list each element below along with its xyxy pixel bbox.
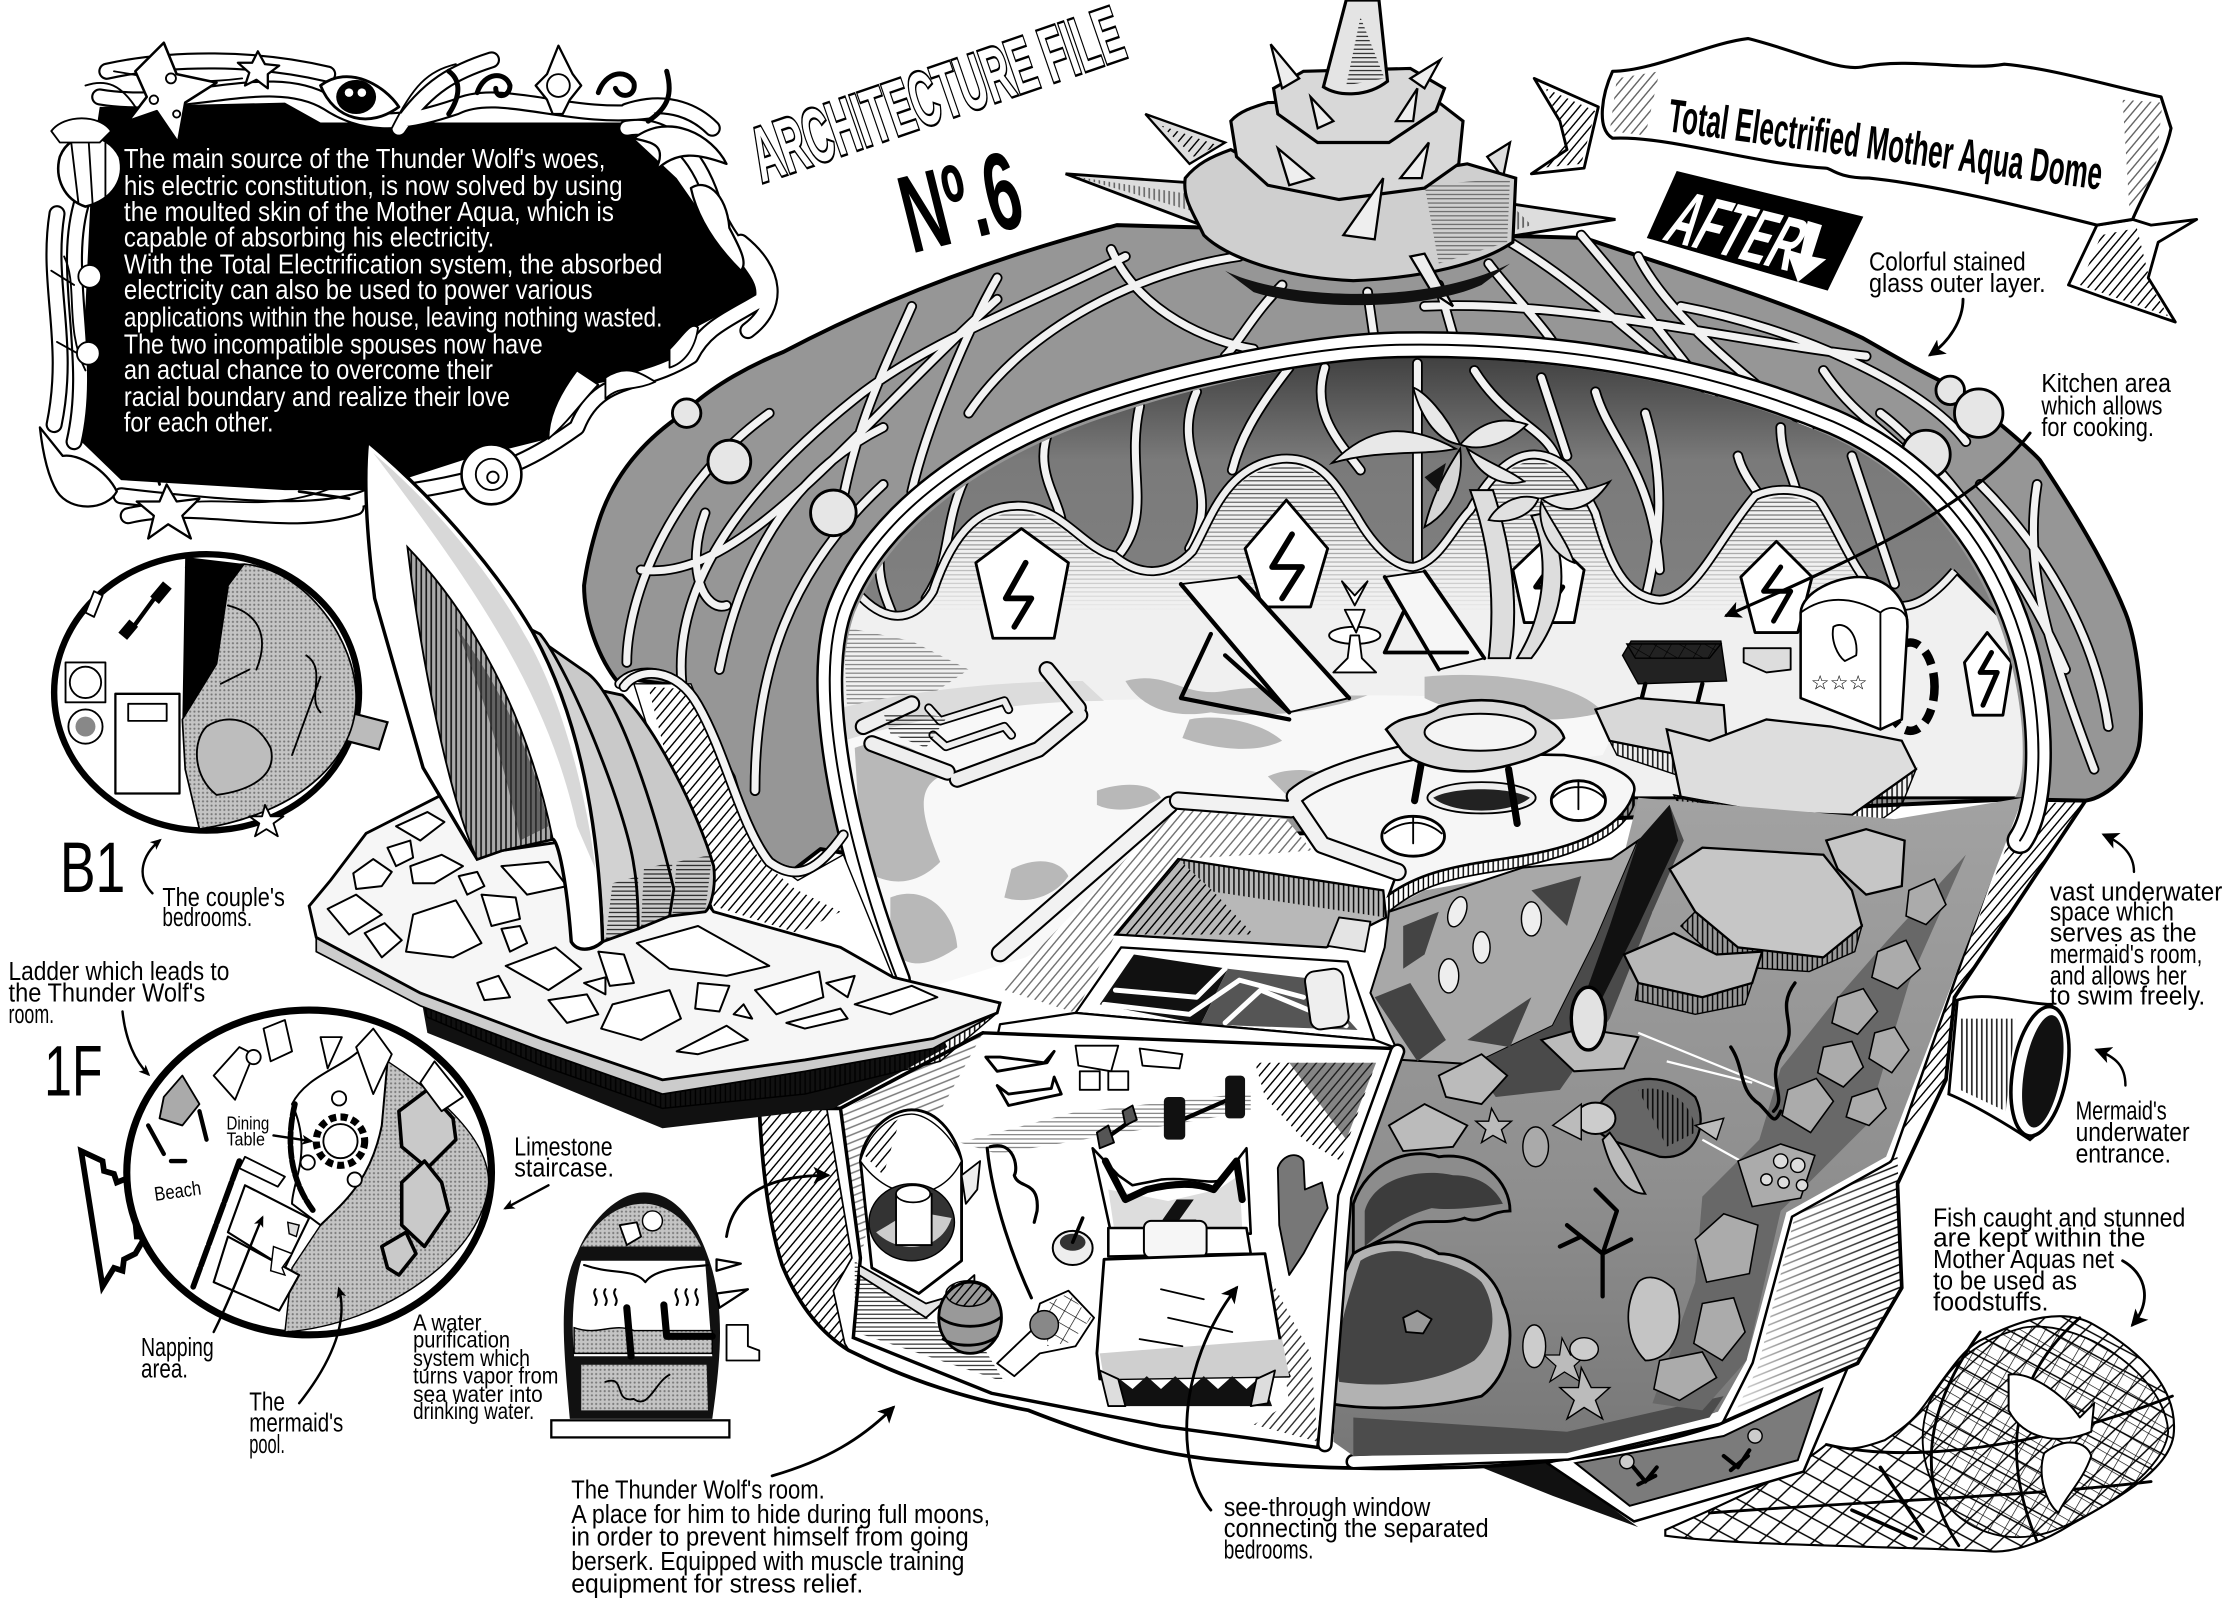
lattice of vines bbox=[620, 235, 2108, 872]
note: kitchen area: which allows bbox=[2041, 393, 2162, 421]
dumbbell and furniture bbox=[66, 581, 179, 794]
fish net bbox=[1665, 1316, 2174, 1552]
entrance stub bbox=[81, 1151, 145, 1286]
label: B1 bbox=[60, 829, 285, 932]
wave shadow hatching bbox=[933, 463, 1856, 605]
note: underwater space: to swim freely. bbox=[2050, 982, 2205, 1010]
note: underwater space: and allows her bbox=[2050, 962, 2187, 990]
large star bbox=[128, 43, 217, 142]
tube ribs bbox=[570, 684, 714, 916]
floor hatch wedge below stone border bbox=[1000, 809, 1389, 1013]
cliff rocks with fish bbox=[1370, 805, 1684, 1097]
plaque text: applications within the house, leaving nothing wasted. bbox=[124, 301, 662, 332]
mortar bbox=[1053, 1218, 1093, 1265]
hanging interior vines bbox=[879, 363, 1895, 634]
plaque text bbox=[124, 143, 662, 438]
note: stained glass: glass outer layer. bbox=[1869, 270, 2046, 298]
note: fish storage: foodstuffs. bbox=[1933, 1289, 2049, 1317]
note: underwater entrance bbox=[2076, 1050, 2190, 1168]
rosettes bbox=[78, 265, 101, 288]
plaque text: The main source of the Thunder Wolf's woes, bbox=[124, 143, 605, 174]
dome rim ring bbox=[830, 345, 2038, 980]
plaque text: for each other. bbox=[124, 407, 274, 438]
note: ladder: room. bbox=[9, 1001, 54, 1029]
spiked crown bbox=[1066, 0, 1615, 306]
banner tails bbox=[1531, 78, 1598, 174]
vine detail bbox=[51, 64, 456, 506]
ruffled dining table bbox=[1386, 700, 1564, 823]
hatched lower right wall bbox=[1731, 1157, 1902, 1420]
note: see-through window: see-through window bbox=[1224, 1494, 1431, 1522]
hatched right wall bbox=[1886, 801, 2086, 1157]
lower room: Thunder Wolf's room bbox=[840, 1033, 1393, 1447]
note: water purification: A water bbox=[413, 1310, 482, 1336]
note: stained glass bbox=[1869, 249, 2046, 355]
note: underwater space: vast underwater bbox=[2050, 878, 2223, 906]
hatched skirt of the tube bbox=[624, 673, 893, 977]
left sand steps bbox=[863, 670, 1080, 779]
note: water purification: purification bbox=[413, 1327, 510, 1353]
info plaque with ornate frame bbox=[40, 43, 770, 539]
limestone steps bbox=[356, 1029, 463, 1275]
note: Thunder Wolf's room: A place for him to hide during full moons, bbox=[571, 1499, 990, 1529]
eye ornament bbox=[321, 77, 399, 119]
racket net bbox=[997, 1291, 1094, 1376]
note: fish storage: are kept within the bbox=[1933, 1225, 2145, 1253]
fish in net bbox=[2009, 1374, 2094, 1513]
giant clam bbox=[1324, 1154, 1510, 1408]
note: mermaid's pool: The bbox=[249, 1388, 285, 1416]
note: see-through window bbox=[1187, 1288, 1489, 1565]
note: water purification bbox=[413, 1310, 558, 1424]
painted keel plate bbox=[1576, 1389, 1822, 1506]
right rock column bbox=[1652, 855, 1966, 1410]
white floor band under rug bbox=[997, 1013, 1397, 1061]
note: kitchen area bbox=[1727, 370, 2172, 615]
lower stepping platforms bbox=[1624, 829, 1905, 1014]
label: B1: The couple's bbox=[162, 884, 285, 912]
black plaque body bbox=[78, 103, 755, 490]
note: ladder: Ladder which leads to bbox=[9, 958, 229, 986]
top dome compartment bbox=[581, 1204, 701, 1247]
note: ladder: the Thunder Wolf's bbox=[9, 980, 205, 1008]
kitchen: grill, counter, refrigerator and float: ☆☆☆ bbox=[1811, 671, 1868, 695]
fishing rod bbox=[987, 1146, 1037, 1298]
cylinder base outer wall bbox=[759, 799, 2086, 1468]
underwater space bbox=[1324, 798, 2023, 1456]
note: water purification: turns vapor from bbox=[413, 1362, 558, 1388]
note: fish storage: to be used as bbox=[1933, 1267, 2077, 1295]
note: Thunder Wolf's room: berserk. Equipped with muscle training bbox=[571, 1546, 964, 1576]
note: mermaid's pool bbox=[249, 1289, 343, 1459]
fleur ornament bbox=[536, 46, 581, 114]
plaque text: capable of absorbing his electricity. bbox=[124, 221, 494, 252]
note: fish storage: Mother Aquas net bbox=[1933, 1246, 2114, 1274]
note: Thunder Wolf's room: The Thunder Wolf's room. bbox=[571, 1475, 825, 1505]
small spikes bbox=[1271, 44, 1453, 306]
label: 1F: 1F bbox=[44, 1033, 103, 1112]
plan labels: Dining bbox=[227, 1113, 269, 1134]
note: underwater entrance: underwater bbox=[2076, 1119, 2190, 1147]
dumbbells bbox=[1097, 1076, 1245, 1148]
left wall hatching bbox=[844, 630, 968, 704]
note: Thunder Wolf's room bbox=[571, 1408, 990, 1599]
see-through window bbox=[1278, 1155, 1328, 1275]
note: mermaid's pool: mermaid's bbox=[249, 1410, 343, 1438]
bed with lightning headboard bbox=[1093, 1148, 1289, 1406]
stepping platforms bbox=[1595, 698, 1916, 841]
plaque text: an actual chance to overcome their bbox=[124, 354, 493, 385]
plan labels bbox=[153, 1113, 311, 1206]
plan labels: Table bbox=[227, 1128, 265, 1149]
note: Thunder Wolf's room: equipment for stress relief. bbox=[571, 1569, 863, 1599]
dome orbs bbox=[672, 376, 2003, 536]
beach chairs and side table bbox=[1181, 571, 1484, 719]
plaque text: With the Total Electrification system, the absorbed bbox=[124, 249, 662, 280]
base bbox=[551, 1420, 729, 1437]
floor shading bbox=[840, 1033, 1251, 1382]
note: see-through window: connecting the separated bbox=[1224, 1515, 1489, 1543]
after stamp bbox=[1647, 171, 1863, 291]
tiers bbox=[1185, 150, 1516, 281]
label: B1: bedrooms. bbox=[162, 904, 252, 932]
diagram: water purification tank bbox=[551, 1175, 828, 1437]
note: napping area: area. bbox=[141, 1356, 188, 1384]
plaque text: the moulted skin of the Mother Aqua, which is bbox=[124, 196, 614, 227]
frame vines bbox=[40, 43, 770, 539]
note: underwater space: space which bbox=[2050, 898, 2174, 926]
turtle bbox=[1553, 1079, 1724, 1194]
plaque text: racial boundary and realize their love bbox=[124, 381, 510, 412]
lower tank bbox=[581, 1365, 708, 1410]
note: see-through window: bedrooms. bbox=[1224, 1537, 1313, 1565]
room window divider bbox=[1325, 1051, 1397, 1445]
right leaves bbox=[634, 126, 727, 171]
label: B1: B1 bbox=[60, 829, 125, 908]
note: underwater space: serves as the bbox=[2050, 920, 2197, 948]
small star bbox=[238, 51, 279, 88]
plaque text: his electric constitution, is now solved by using bbox=[124, 170, 623, 201]
plan: 1F bbox=[81, 1010, 491, 1335]
palm trees bbox=[1332, 388, 1610, 658]
heading: number six: Nº.6 bbox=[887, 127, 1034, 277]
beach path and napping area bbox=[192, 1157, 309, 1311]
hexagon area bbox=[160, 1076, 199, 1125]
central platform bbox=[1295, 752, 1634, 912]
note: water purification: sea water into bbox=[413, 1381, 543, 1407]
note: ladder bbox=[9, 958, 229, 1074]
after stamp: AFTER bbox=[1653, 176, 1822, 286]
snail shell bbox=[462, 445, 521, 504]
stair pit bbox=[1115, 859, 1386, 952]
note: underwater entrance: entrance. bbox=[2076, 1140, 2171, 1168]
dome interior cutaway bbox=[812, 349, 2051, 1456]
stone patio bbox=[309, 795, 1000, 1128]
wall plaques with lightning bolts bbox=[976, 500, 2011, 715]
note: kitchen area: Kitchen area bbox=[2041, 370, 2172, 398]
ceiling ladder rungs bbox=[986, 1046, 1182, 1105]
note: water purification: drinking water. bbox=[413, 1398, 534, 1424]
clam bed and seaweed outlines bbox=[197, 605, 321, 836]
note: underwater entrance: Mermaid's bbox=[2076, 1098, 2167, 1126]
stone border tubes bbox=[1000, 752, 1410, 953]
kitchen: grill, counter, refrigerator and float bbox=[1623, 577, 1935, 731]
note: fish storage: Fish caught and stunned bbox=[1933, 1205, 2185, 1233]
title banner bbox=[1531, 39, 2197, 322]
barnacle cluster bbox=[1761, 1154, 1808, 1191]
barrel bbox=[939, 1281, 1001, 1353]
wave white trim bbox=[840, 454, 1954, 616]
hatched left wall bbox=[759, 1105, 852, 1351]
plaque text: electricity can also be used to power various bbox=[124, 274, 593, 305]
sand floor bbox=[856, 796, 1286, 853]
outlets and tap bbox=[717, 1259, 748, 1308]
coral, anemone, stars and small fish bbox=[1476, 1108, 1679, 1419]
note: stained glass: Colorful stained bbox=[1869, 249, 2026, 277]
seaweed bbox=[1731, 983, 1795, 1119]
inner white band bbox=[1353, 799, 2011, 1462]
note: mermaid's pool: pool. bbox=[249, 1431, 285, 1459]
note: underwater space bbox=[2050, 835, 2223, 1010]
left ribbed tube and fin bbox=[366, 442, 714, 949]
long side spikes bbox=[1066, 174, 1228, 235]
bottom star bbox=[137, 484, 199, 539]
note: napping area bbox=[141, 1218, 262, 1384]
pool bbox=[285, 1061, 489, 1332]
main spike bbox=[1323, 0, 1388, 94]
mirror on vanity platform bbox=[1389, 987, 1638, 1151]
wavy back wall bbox=[840, 454, 2051, 798]
paving stones bbox=[328, 812, 937, 1054]
fin bbox=[366, 442, 603, 949]
note: limestone staircase: staircase. bbox=[514, 1155, 614, 1183]
note: Thunder Wolf's room: in order to prevent himself from going bbox=[571, 1522, 969, 1552]
hull underside bbox=[1482, 1368, 1848, 1527]
evaporator chamber bbox=[573, 1261, 712, 1356]
note: napping area: Napping bbox=[141, 1334, 214, 1362]
plan: B1 bbox=[54, 554, 387, 836]
lower water shadows bbox=[1353, 1396, 1724, 1456]
swirls bbox=[449, 71, 669, 121]
lounge furniture bbox=[214, 1020, 342, 1100]
note: limestone staircase bbox=[506, 1133, 614, 1208]
dark wall hatching bbox=[1255, 1063, 1376, 1161]
banner ribbon bbox=[1602, 39, 2171, 225]
rug with zigzag pattern bbox=[1076, 947, 1375, 1040]
conch bbox=[40, 427, 117, 506]
note: kitchen area: for cooking. bbox=[2041, 414, 2154, 442]
note: limestone staircase: Limestone bbox=[514, 1133, 613, 1161]
purification capsule bbox=[859, 1110, 980, 1318]
dome outer shell bbox=[584, 225, 2141, 873]
note: fish storage bbox=[1933, 1205, 2185, 1325]
water inlet pipe bbox=[1949, 997, 2078, 1141]
light water streaks bbox=[1467, 869, 1795, 1175]
black divider bbox=[182, 557, 245, 719]
plan labels: Beach bbox=[153, 1178, 203, 1206]
plaque text: The two incompatible spouses now have bbox=[124, 328, 543, 359]
note: water purification: system which bbox=[413, 1345, 530, 1371]
dining gear table bbox=[290, 1091, 365, 1211]
pool tone bbox=[182, 564, 356, 829]
seashell bbox=[58, 136, 121, 207]
